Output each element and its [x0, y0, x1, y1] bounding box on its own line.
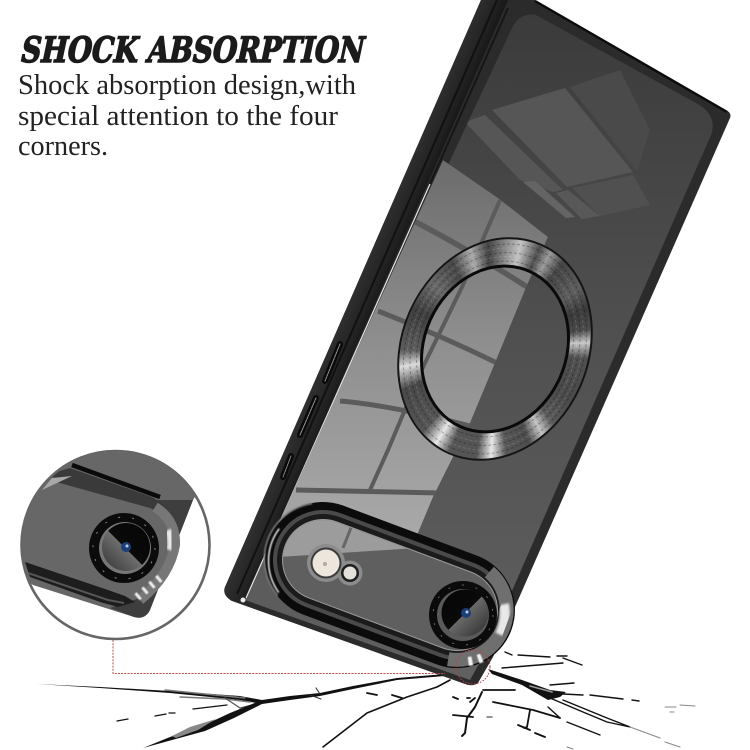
button: volume down	[300, 398, 316, 435]
phone case body	[224, 0, 731, 685]
inset: top band	[52, 468, 157, 510]
phone	[224, 0, 731, 685]
description text: special attention to the four	[18, 101, 339, 132]
crack: middle	[323, 680, 450, 747]
dashed leader line	[113, 640, 445, 674]
crack: right thin branches	[502, 652, 639, 701]
inset: lens	[89, 513, 159, 583]
floor cracks	[37, 652, 695, 749]
crack: lower centre branch	[462, 692, 482, 736]
description text: Shock absorption design,with	[18, 70, 356, 101]
side strip	[224, 0, 508, 601]
corner highlight circle	[456, 650, 490, 684]
island metal end	[448, 569, 520, 673]
edge highlight	[246, 184, 430, 598]
side buttons	[283, 344, 340, 477]
bottom corner pin	[240, 598, 246, 602]
inset: metal rim	[140, 507, 175, 600]
button: volume up	[325, 344, 340, 381]
flash module	[307, 544, 362, 586]
inset: right dark edge	[110, 500, 193, 618]
inset: corner detail	[22, 452, 195, 618]
description text	[18, 70, 356, 162]
crack: long left	[37, 674, 445, 704]
window reflection upper	[465, 70, 650, 219]
microphone dot	[344, 566, 356, 580]
description text: corners.	[18, 131, 108, 162]
magnetic ring	[397, 237, 593, 461]
flash lens	[312, 550, 340, 576]
back panel	[245, 15, 713, 680]
window reflection lower	[271, 160, 548, 552]
inset: bottom band	[25, 562, 135, 607]
title: SHOCK ABSORPTION	[17, 30, 369, 71]
island outer highlight	[251, 493, 312, 595]
crack: right thick	[488, 669, 566, 700]
inset zoom circle	[20, 450, 211, 640]
camera island	[262, 502, 515, 668]
island glass reflection	[283, 520, 407, 557]
main camera lens	[429, 581, 497, 649]
button: side port	[283, 456, 291, 477]
